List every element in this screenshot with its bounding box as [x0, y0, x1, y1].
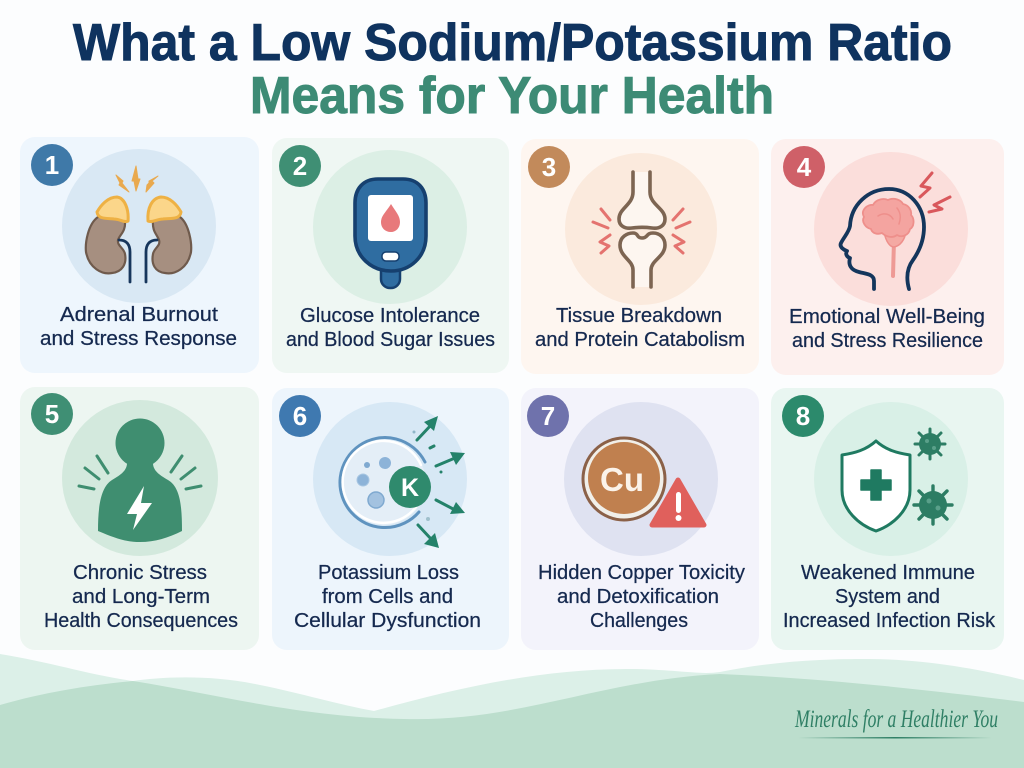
label: and Protein Catabolism [535, 329, 745, 351]
label: System and [835, 586, 940, 608]
badge 5 [31, 393, 73, 435]
badge 8: 8 [796, 401, 810, 431]
panel: adrenal burnout [20, 137, 259, 373]
label: Emotional Well-Being [789, 306, 985, 328]
label [286, 305, 495, 351]
panel: potassium loss [272, 388, 509, 650]
icon: copper warning [583, 438, 704, 525]
badge 6: 6 [293, 401, 307, 431]
panel: glucose intolerance [272, 138, 509, 373]
icon: knee joint [593, 172, 690, 287]
label [40, 304, 237, 350]
badge 6 [279, 395, 321, 437]
badge 4 [783, 146, 825, 188]
label: and Long-Term [72, 586, 210, 608]
badge 3: 3 [542, 152, 556, 182]
label: Tissue Breakdown [556, 305, 722, 327]
label: Glucose Intolerance [300, 305, 480, 327]
panel: emotional well-being [771, 139, 1004, 375]
label [789, 306, 985, 352]
label [294, 562, 481, 632]
label: Potassium Loss [318, 562, 459, 584]
badge 1 [31, 144, 73, 186]
label: Weakened Immune [801, 562, 975, 584]
label: Hidden Copper Toxicity [538, 562, 745, 584]
label: and Stress Resilience [792, 330, 983, 352]
icon: shield and viruses [842, 429, 952, 531]
label: and Stress Response [40, 328, 237, 350]
label: and Detoxification [557, 586, 719, 608]
icon: potassium leaving cell [340, 416, 465, 548]
icon: stressed person [79, 418, 201, 542]
panel: tissue breakdown [521, 139, 759, 374]
badge 8 [782, 395, 824, 437]
icon: head with brain [841, 173, 950, 289]
icon: copper warning: Cu [600, 461, 644, 498]
panel: hidden copper toxicity [521, 388, 759, 650]
badge 3 [528, 146, 570, 188]
badge 5: 5 [45, 399, 59, 429]
label: Increased Infection Risk [783, 610, 996, 632]
label [44, 562, 238, 632]
badge 4: 4 [797, 152, 812, 182]
label: and Blood Sugar Issues [286, 329, 495, 351]
badge 1: 1 [45, 150, 59, 180]
label: Adrenal Burnout [60, 304, 218, 326]
label: Health Consequences [44, 610, 238, 632]
label [538, 562, 745, 632]
title: Means for Your Health [250, 67, 774, 125]
icon: potassium leaving cell: K [401, 474, 419, 502]
icon: glucose meter [355, 179, 426, 288]
panel: chronic stress [20, 387, 259, 650]
label: Chronic Stress [73, 562, 207, 584]
panel: weakened immune system [771, 388, 1004, 650]
label: from Cells and [322, 586, 453, 608]
badge 2 [279, 145, 321, 187]
footer waves [0, 654, 1024, 768]
title [73, 14, 952, 125]
badge 7: 7 [541, 401, 555, 431]
icon: kidneys and adrenal glands [86, 166, 191, 282]
label [535, 305, 745, 351]
label: Challenges [590, 610, 688, 632]
label [783, 562, 996, 632]
badge 2: 2 [293, 151, 307, 181]
title: What a Low Sodium/Potassium Ratio [73, 14, 952, 72]
badge 7 [527, 395, 569, 437]
label: Cellular Dysfunction [294, 610, 481, 632]
